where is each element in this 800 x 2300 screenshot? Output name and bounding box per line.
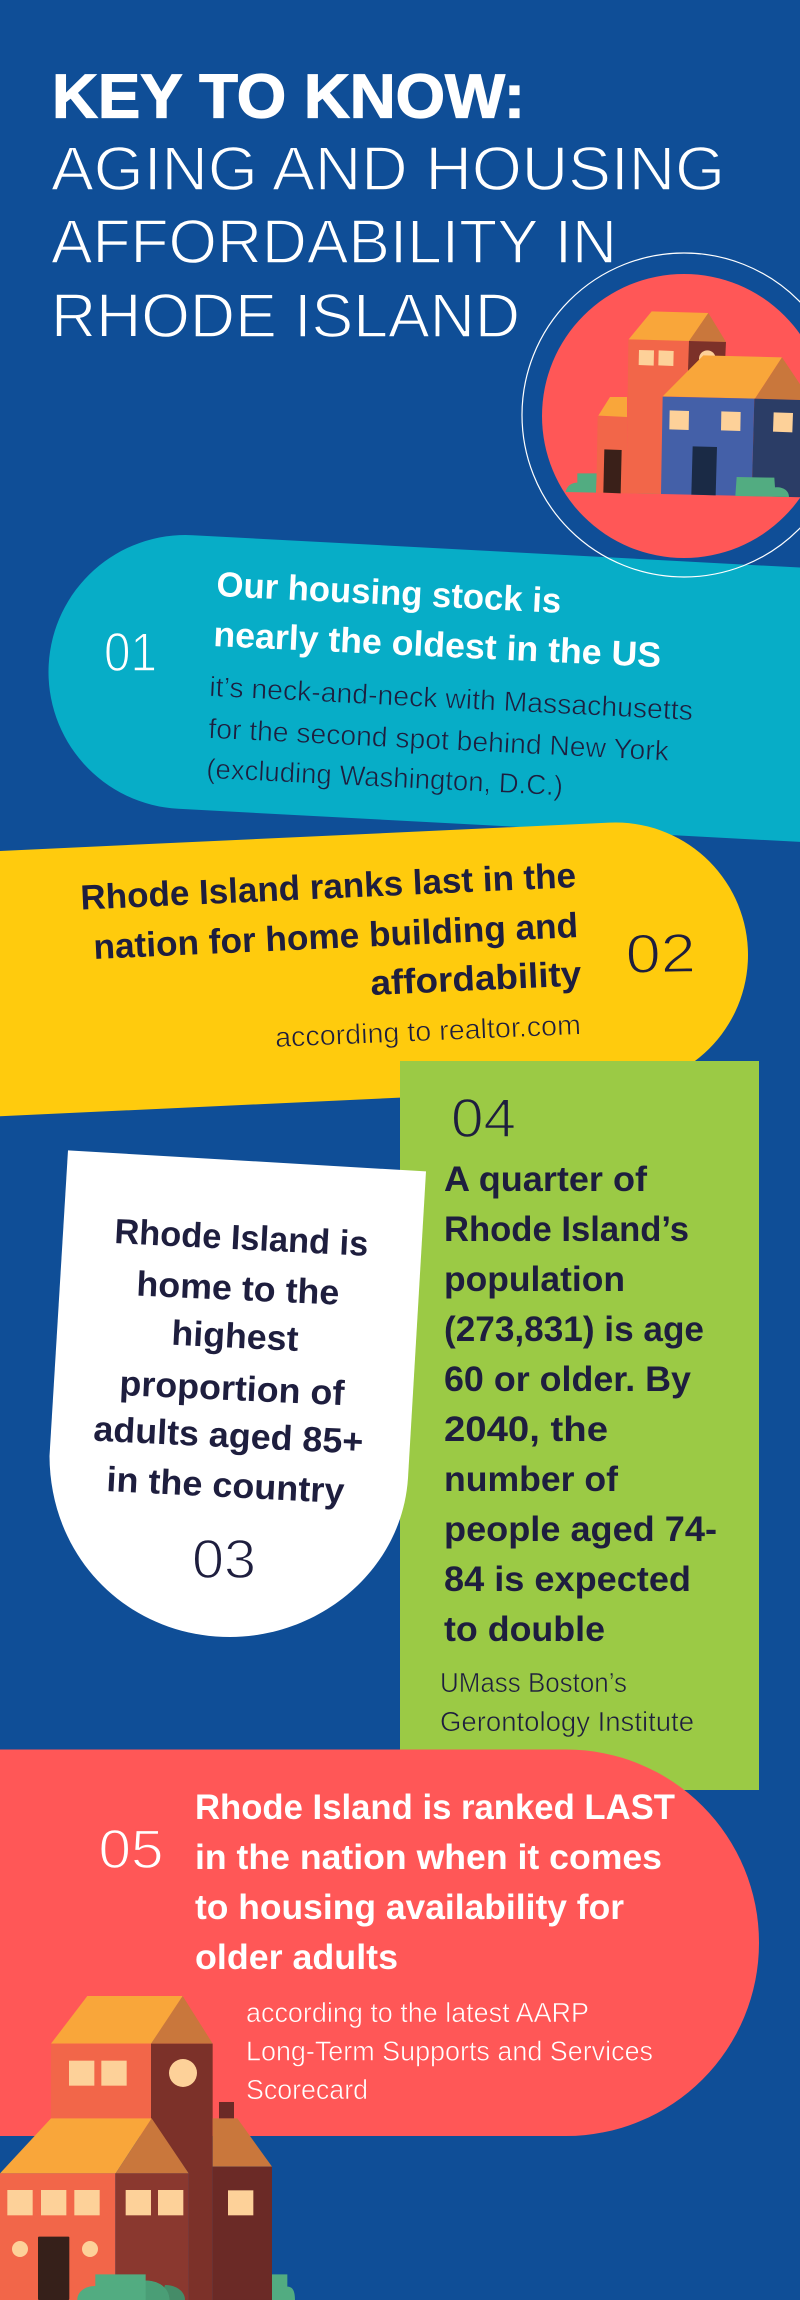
heading 05 <box>195 1788 675 1977</box>
heading 03: highest <box>171 1314 300 1359</box>
body 01 <box>206 671 694 801</box>
heading 01: nearly the oldest in the US <box>213 615 662 675</box>
body 01: (excluding Washington, D.C.) <box>206 753 564 801</box>
panel 04: quarter of population <box>400 1061 759 1790</box>
heading 04: people aged 74- <box>444 1510 717 1549</box>
body 01: for the second spot behind New York <box>208 713 671 767</box>
number 01: 01 <box>104 621 157 683</box>
body 01: it’s neck-and-neck with Massachusetts <box>209 671 694 726</box>
body 04: Gerontology Institute <box>440 1706 694 1737</box>
panel 05: housing availability <box>0 1750 759 2136</box>
body 04: UMass Boston’s <box>440 1667 627 1698</box>
panel 02: home building <box>0 816 754 1139</box>
heading 03: proportion of <box>119 1364 346 1413</box>
heading 04: 84 is expected <box>444 1560 691 1599</box>
heading 05: to housing availability for <box>195 1888 624 1927</box>
number 05: 05 <box>98 1818 164 1880</box>
heading 03 <box>93 1212 369 1511</box>
body 05: Scorecard <box>246 2074 368 2105</box>
heading 04: population <box>444 1260 625 1299</box>
heading 05: in the nation when it comes <box>195 1838 662 1877</box>
body 05 <box>246 1997 653 2105</box>
title: AGING AND HOUSING <box>51 135 725 204</box>
heading 04 <box>444 1160 717 1649</box>
heading 03: Rhode Island is <box>114 1212 369 1264</box>
number 04: 04 <box>451 1087 516 1149</box>
heading 03: adults aged 85+ <box>93 1410 364 1462</box>
heading 05: older adults <box>195 1938 398 1977</box>
heading 01: Our housing stock is <box>216 565 562 621</box>
title: KEY TO KNOW: <box>52 62 525 132</box>
heading 01 <box>213 565 662 675</box>
number 03: 03 <box>192 1528 256 1590</box>
body 02: according to realtor.com <box>274 1009 581 1053</box>
heading 03: in the country <box>106 1460 346 1511</box>
heading 04: (273,831) is age <box>444 1310 704 1349</box>
icon: large brick house <box>0 1996 295 2300</box>
heading 02: affordability <box>370 954 583 1003</box>
heading 02 <box>80 856 583 1003</box>
heading 02: Rhode Island ranks last in the <box>80 856 577 918</box>
title: RHODE ISLAND <box>51 282 520 351</box>
panel 01: housing stock <box>41 528 800 849</box>
heading 04: 60 or older. By <box>444 1360 692 1399</box>
heading 04: Rhode Island’s <box>444 1210 689 1249</box>
body 04 <box>440 1667 694 1737</box>
title <box>51 62 725 351</box>
heading 04: number of <box>444 1460 618 1499</box>
body 05: according to the latest AARP <box>246 1997 589 2028</box>
title: AFFORDABILITY IN <box>51 208 617 277</box>
body 05: Long-Term Supports and Services <box>246 2036 653 2067</box>
panel 03: adults aged 85+ <box>50 1150 426 1637</box>
heading 05: Rhode Island is ranked LAST <box>195 1788 675 1827</box>
heading 03: home to the <box>136 1265 340 1313</box>
heading 04: 2040, the <box>444 1410 608 1449</box>
number 02: 02 <box>625 922 696 985</box>
heading 04: to double <box>444 1610 605 1649</box>
heading 04: A quarter of <box>444 1160 647 1199</box>
icon: houses in a red circle <box>522 253 800 577</box>
heading 02: nation for home building and <box>93 906 579 967</box>
